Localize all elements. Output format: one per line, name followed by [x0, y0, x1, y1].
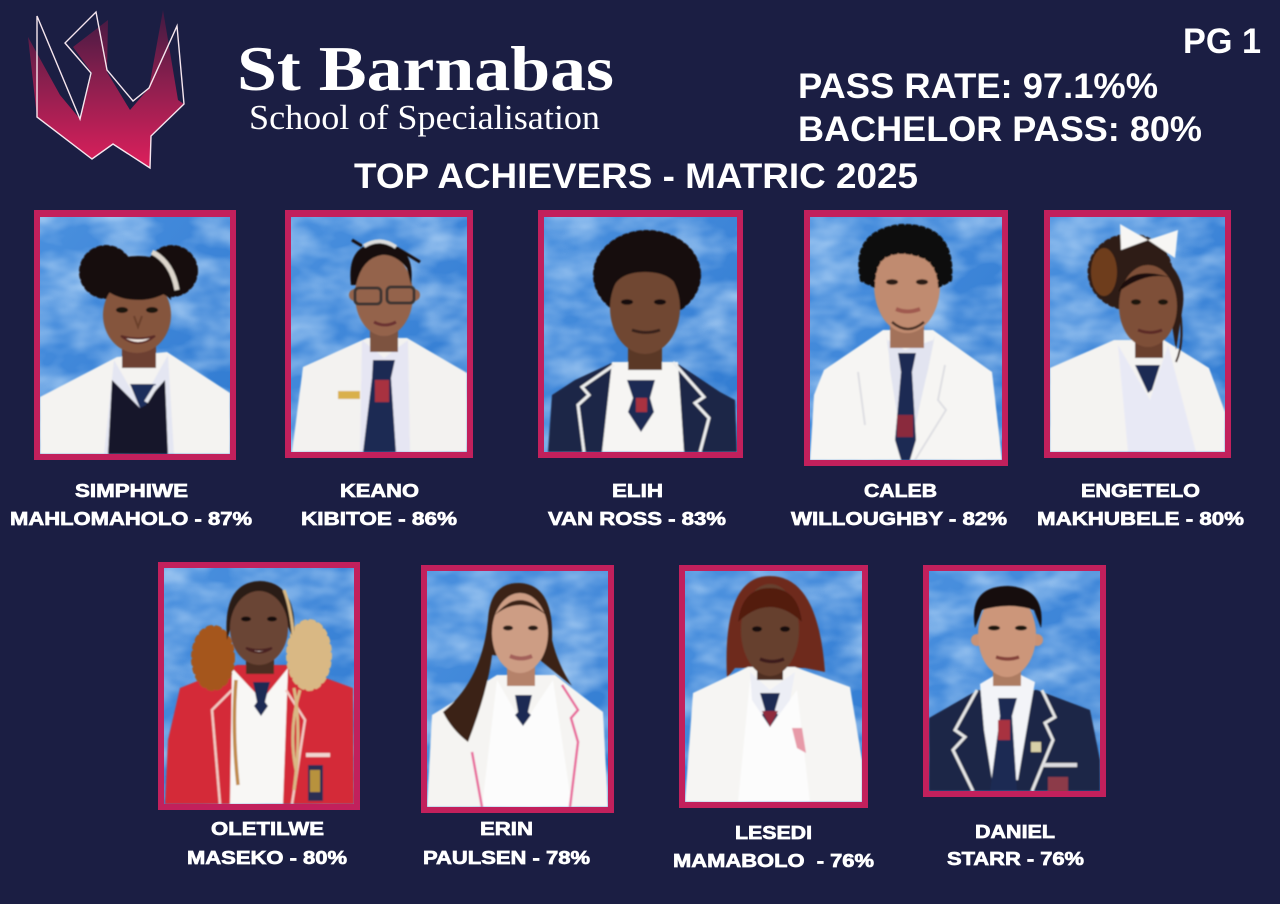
caption: Engetelo: [1037, 481, 1244, 529]
caption: Lesedi: LESEDI: [735, 823, 812, 843]
school name: St Barnabas: [237, 33, 614, 104]
caption: Engetelo: MAKHUBELE - 80%: [1037, 509, 1244, 529]
caption: Caleb: [791, 481, 1007, 529]
caption: Simphiwe: [10, 481, 252, 529]
school name: School of Specialisation: [249, 98, 600, 137]
caption: Erin: ERIN: [480, 819, 533, 839]
caption: Oletilwe: [187, 819, 347, 868]
caption: Keano: KEANO: [340, 481, 419, 501]
portrait: Keano: [285, 210, 473, 458]
caption: Daniel: [947, 822, 1084, 869]
caption: Engetelo: ENGETELO: [1081, 481, 1200, 501]
caption: Keano: [301, 481, 457, 529]
pass rate statistics: [798, 67, 1202, 149]
portrait: Engetelo: [1044, 210, 1231, 458]
caption: Elih: [548, 481, 726, 529]
caption: Simphiwe: MAHLOMAHOLO - 87%: [10, 509, 252, 529]
caption: Lesedi: [673, 823, 874, 871]
icon: school logo: [28, 10, 184, 168]
portrait: Daniel: [923, 565, 1106, 797]
caption: Keano: KIBITOE - 86%: [301, 509, 457, 529]
portrait: Caleb: [804, 210, 1008, 466]
portrait: Lesedi: [679, 565, 868, 808]
caption: Oletilwe: OLETILWE: [211, 819, 324, 839]
portrait: Simphiwe: [34, 210, 236, 460]
caption: Caleb: WILLOUGHBY - 82%: [791, 509, 1007, 529]
caption: Erin: PAULSEN - 78%: [423, 848, 590, 868]
portrait: Elih: [538, 210, 743, 458]
school name: [237, 33, 614, 137]
page number: PG 1: [1183, 22, 1261, 61]
pass rate statistics: PASS RATE: 97.1%%: [798, 67, 1158, 106]
caption: Oletilwe: MASEKO - 80%: [187, 848, 347, 868]
caption: Daniel: STARR - 76%: [947, 849, 1084, 869]
caption: Erin: [423, 819, 590, 868]
portrait: Oletilwe: [158, 562, 360, 810]
caption: Caleb: CALEB: [864, 481, 937, 501]
portrait: Erin: [421, 565, 614, 813]
caption: Daniel: DANIEL: [975, 822, 1055, 842]
caption: Lesedi: MAMABOLO - 76%: [673, 851, 874, 871]
caption: Simphiwe: SIMPHIWE: [75, 481, 188, 501]
caption: Elih: ELIH: [612, 481, 663, 501]
caption: Elih: VAN ROSS - 83%: [548, 509, 726, 529]
pass rate statistics: BACHELOR PASS: 80%: [798, 110, 1202, 149]
title: TOP ACHIEVERS - MATRIC 2025: [354, 157, 918, 196]
